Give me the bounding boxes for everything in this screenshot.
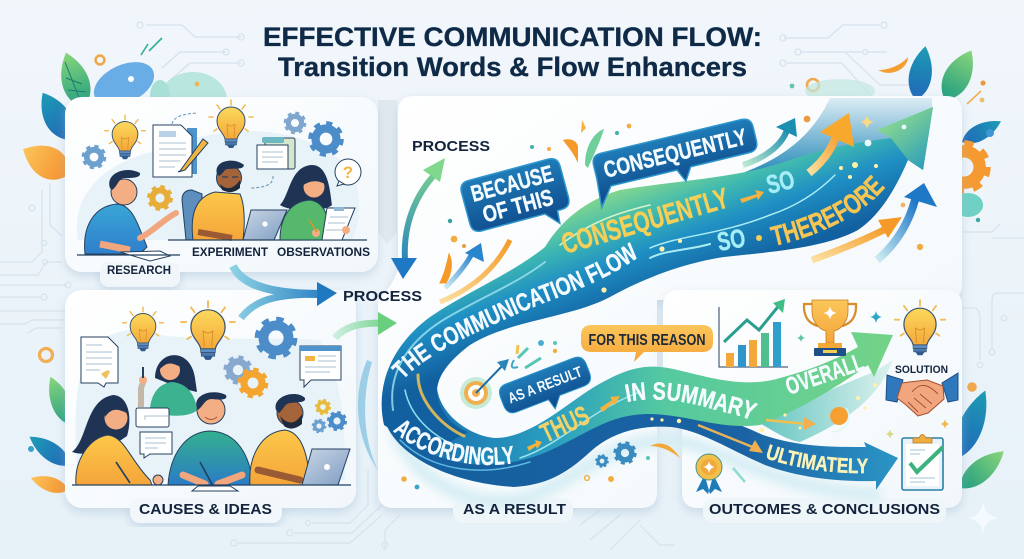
person: experiment — [168, 161, 367, 240]
label: process top: PROCESS — [412, 138, 490, 155]
ribbon text: consequently: CONSEQUENTLY — [558, 183, 732, 261]
label: research: RESEARCH — [107, 265, 171, 277]
small marks near target — [512, 340, 557, 368]
icon: trophy — [804, 300, 856, 356]
callout: for this reason — [581, 325, 713, 362]
callout: because of this: BECAUSE — [468, 160, 556, 207]
arrow head tint — [877, 107, 933, 170]
ribbon text: the communication flow: THE COMMUNICATION FLOW — [390, 242, 637, 378]
wash — [76, 330, 345, 480]
gold dot — [756, 235, 762, 241]
decoration: top-right leaves and gear — [790, 44, 1005, 222]
table line and paper — [72, 485, 351, 491]
icon: dashed flow arrows — [172, 113, 273, 188]
heading: title: EFFECTIVE COMMUNICATION FLOW: — [263, 22, 762, 52]
ribbon text: therefore: THEREFORE — [769, 174, 886, 246]
lower dark band — [384, 408, 898, 490]
callout: as a result — [497, 355, 597, 426]
chart: rising bars — [719, 299, 788, 367]
icon: target with arrow — [460, 359, 509, 409]
person: centre man — [168, 392, 253, 486]
arrow: double-headed process — [391, 158, 445, 279]
icon: message window — [300, 346, 341, 387]
decoration: top-left leaves — [16, 38, 227, 188]
icon: chat cards — [136, 408, 172, 458]
panel: research team — [65, 97, 378, 287]
sparkle dots — [601, 162, 878, 432]
icon: question bubble: ? — [343, 163, 353, 182]
arrow: causes to flow — [335, 312, 397, 338]
panel: causes and ideas — [65, 290, 356, 523]
glow dots — [865, 125, 906, 146]
label: experiment: EXPERIMENT — [192, 247, 268, 259]
callout: for this reason: FOR THIS REASON — [588, 332, 706, 349]
ribbon arrow right — [766, 417, 816, 430]
icon: bulbs — [123, 301, 235, 360]
ribbon text: so lower: SO — [715, 223, 748, 257]
ribbon text: so upper: SO — [763, 164, 798, 200]
heading: subtitle: Transition Words & Flow Enhancers — [278, 52, 747, 82]
callout: as a result: AS A RESULT — [506, 364, 585, 407]
icon: bulbs — [105, 100, 253, 159]
person: left woman — [72, 395, 163, 485]
arrow: blue upward right — [877, 183, 937, 260]
upper band — [382, 107, 933, 453]
person: observations — [280, 165, 355, 240]
person: top woman — [139, 355, 197, 416]
label: process middle: PROCESS — [343, 288, 422, 305]
wash — [77, 131, 359, 240]
ribbon text: thus: THUS — [536, 400, 594, 448]
icon: medal — [696, 454, 722, 494]
decoration: right leaves — [947, 382, 1011, 534]
person: research — [77, 170, 180, 261]
label: causes and ideas: CAUSES & IDEAS — [139, 501, 272, 518]
halo — [395, 430, 880, 501]
icon: document and pencil — [153, 125, 208, 177]
icon: folder — [257, 137, 295, 169]
ribbon text: in summary: IN SUMMARY — [624, 382, 758, 419]
icon: gears — [83, 113, 342, 209]
panel: outcomes and conclusions — [663, 290, 962, 523]
arrow: teal upward — [743, 118, 797, 165]
orange orb — [830, 407, 849, 432]
icon: document — [81, 337, 118, 387]
arrow: research to process — [233, 266, 337, 318]
label: observations: OBSERVATIONS — [277, 247, 370, 259]
icon: solution bulb — [895, 300, 945, 355]
blue crescent — [358, 360, 378, 470]
arrows: left small sweep — [440, 240, 510, 302]
arrow: orange right — [812, 217, 902, 260]
callout: consequently: CONSEQUENTLY — [601, 123, 749, 183]
panel: communication flow — [378, 96, 962, 523]
ribbon arrow long — [698, 425, 763, 453]
ribbon arrow — [527, 440, 542, 451]
ribbon text: accordingly: ACCORDINGLY — [392, 420, 513, 466]
icon: handshake — [886, 373, 958, 416]
highlights — [392, 175, 835, 470]
person: right man — [250, 394, 350, 485]
callout: because of this: OF THIS — [480, 184, 556, 227]
icon: gears — [225, 319, 346, 432]
ribbon text: ultimately: ULTIMATELY — [766, 444, 868, 474]
ribbon text: overall: OVERALL — [782, 349, 868, 401]
ribbon arrow — [740, 190, 764, 203]
dots around bubbles — [448, 116, 923, 250]
label: as a result: AS A RESULT — [463, 501, 566, 518]
flow ribbon — [382, 98, 933, 501]
icon: clipboard — [902, 434, 943, 490]
vertical shaded strip — [378, 100, 397, 244]
callout: because of this — [459, 157, 574, 246]
haze — [745, 98, 932, 172]
pale sparkle region — [750, 360, 893, 442]
icon: question bubble — [335, 159, 361, 186]
decoration: left leaves — [24, 348, 79, 497]
arrow: orange upward — [809, 113, 854, 173]
icon: small gears — [596, 443, 635, 467]
callout: consequently — [589, 117, 763, 208]
middle band — [384, 332, 893, 465]
ribbon arrow — [600, 396, 620, 412]
decorative marks below ribbon — [401, 443, 745, 489]
label: solution: SOLUTION — [895, 364, 948, 376]
sparkles — [797, 115, 950, 439]
label: outcomes and conclusions: OUTCOMES & CONCLUSIONS — [709, 501, 940, 518]
